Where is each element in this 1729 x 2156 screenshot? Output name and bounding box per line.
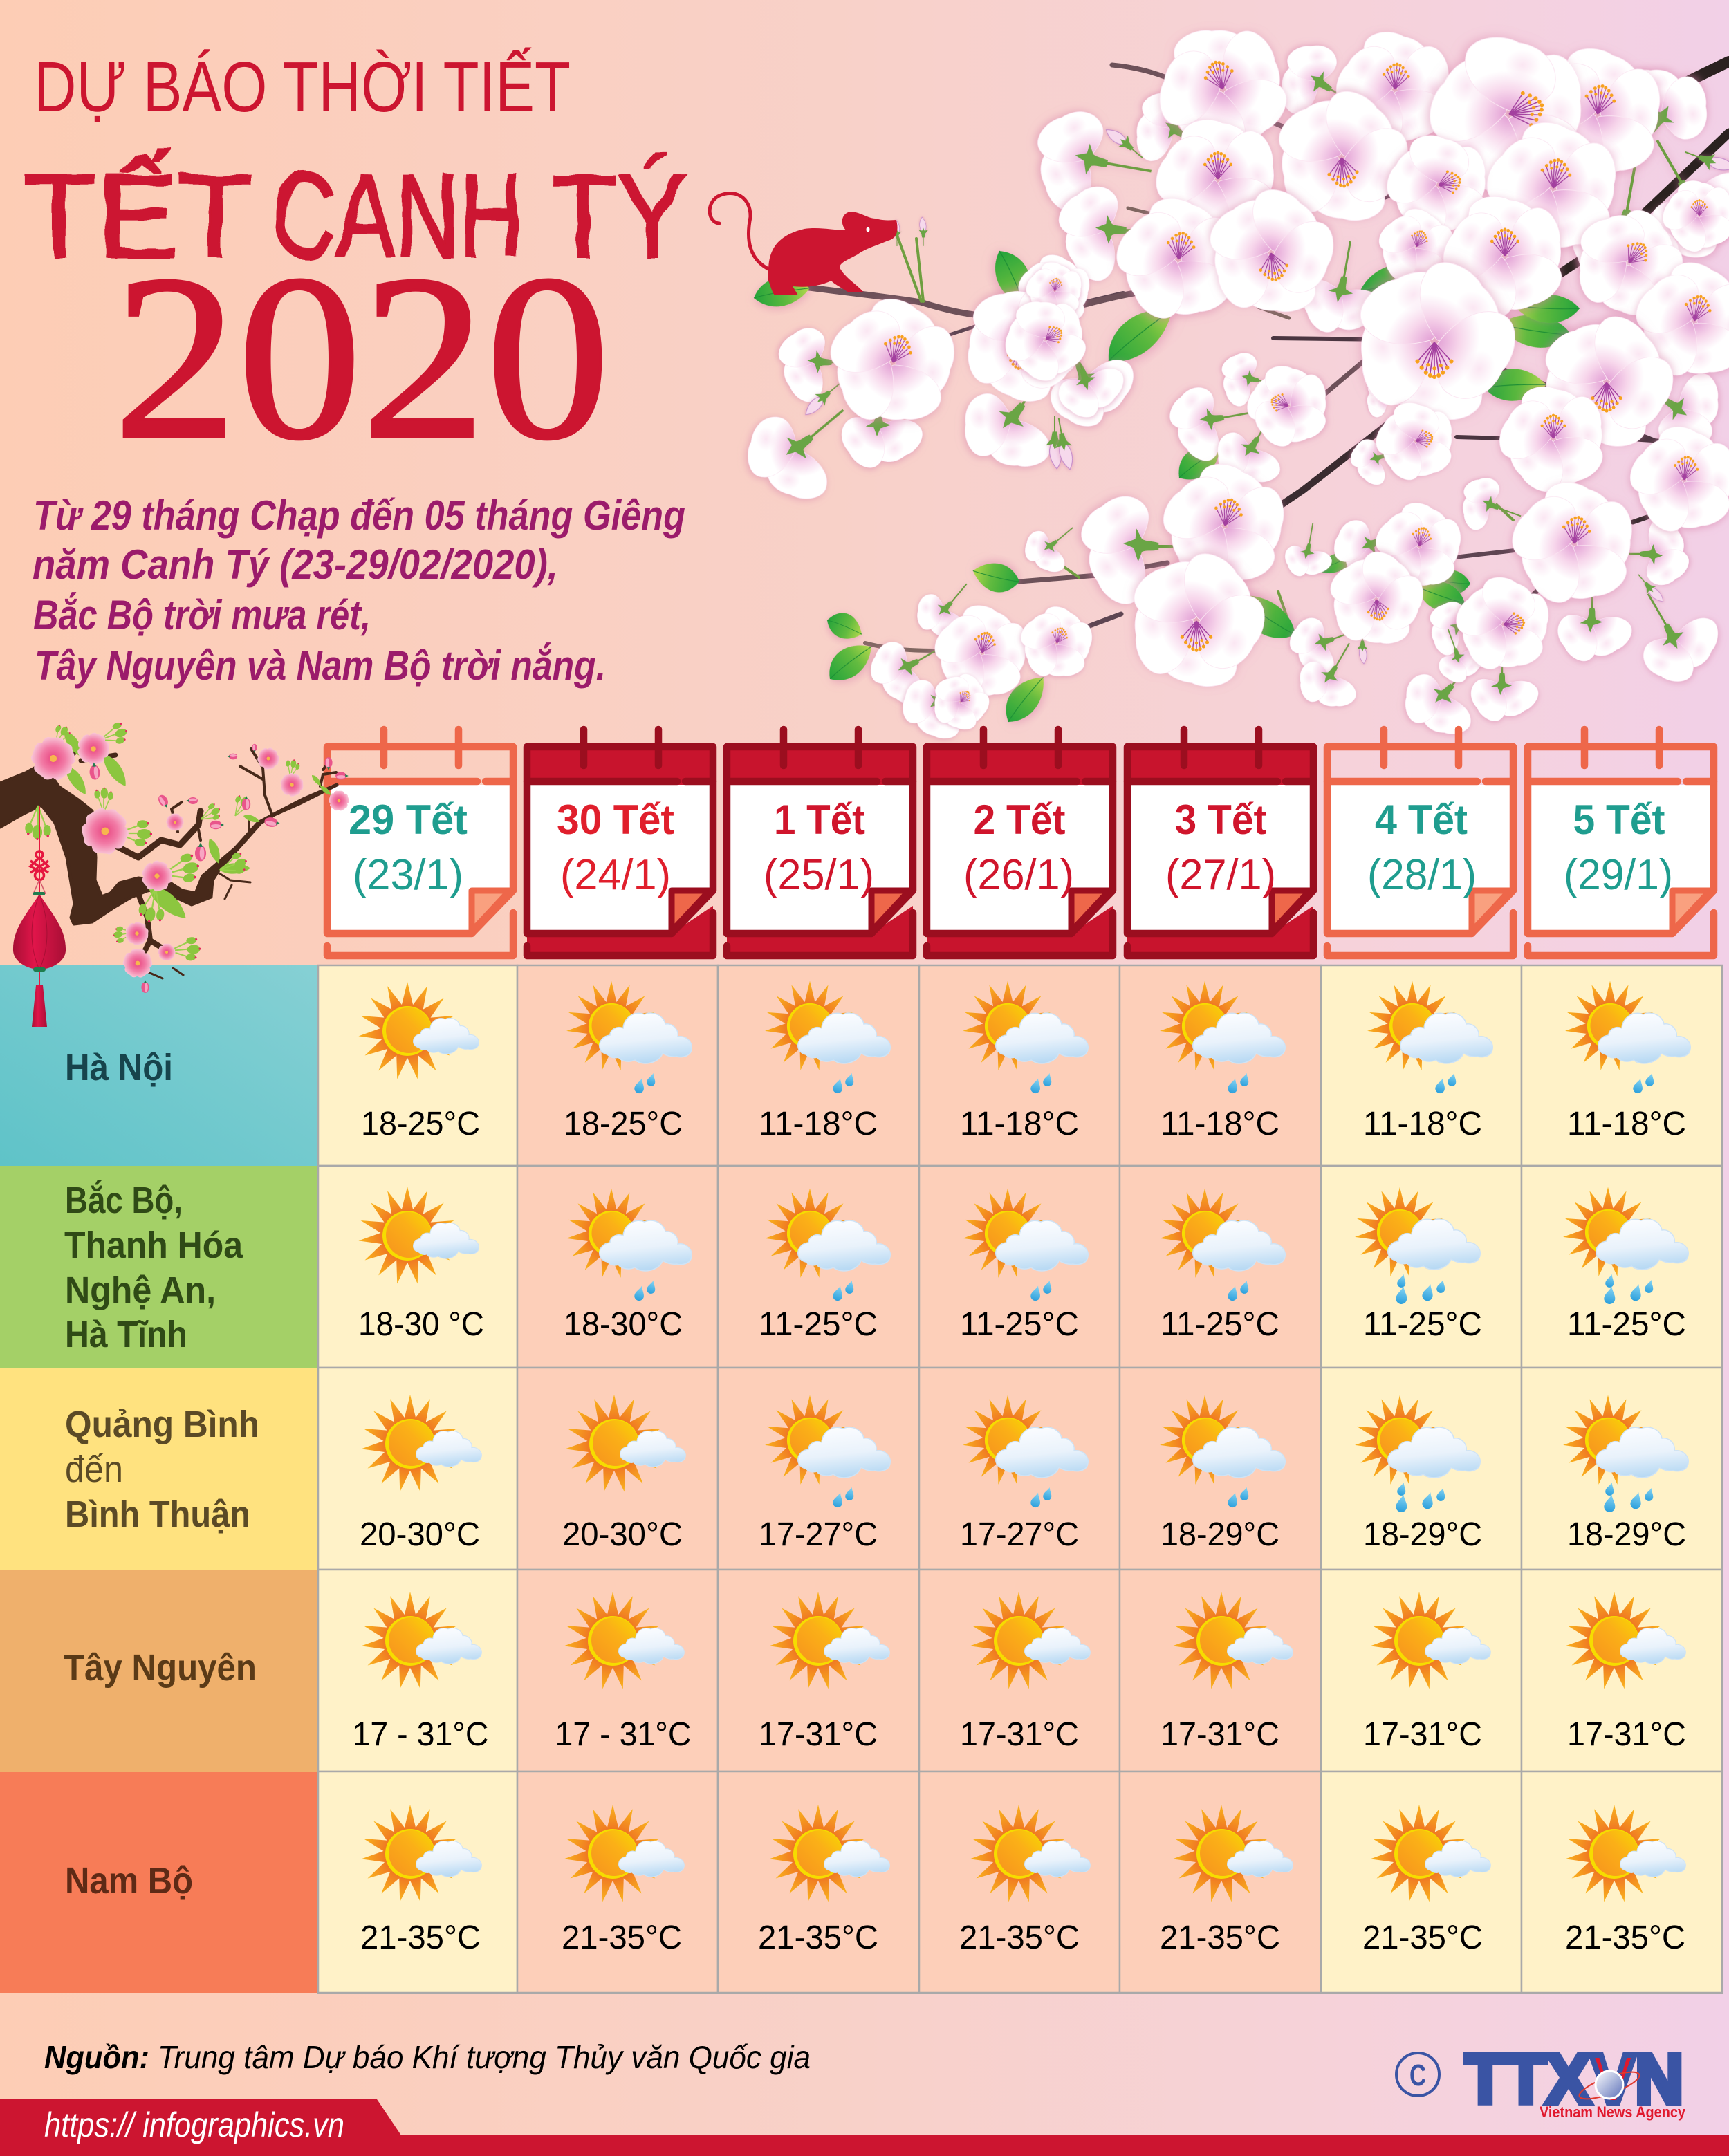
- title: Tết Canh Tý: CANH: [272, 149, 524, 282]
- row: Hà Nội: 18-25°C: [361, 1106, 480, 1142]
- region label: Bắc Bộ: Hà Tĩnh: [65, 1314, 187, 1355]
- calendar: 2 Tết: 2 Tết: [974, 797, 1066, 843]
- region label: Tây Nguyên: Tây Nguyên: [64, 1647, 257, 1689]
- calendar: 4 Tết: [1327, 729, 1513, 956]
- row: Tây Nguyên: 17-31°C: [1567, 1716, 1686, 1753]
- side flowers and buds: [718, 22, 1729, 760]
- row: Bắc Bộ, Thanh Hóa, Nghệ An, Hà Tĩnh: 11-25°C: [1363, 1306, 1482, 1343]
- row: Nam Bộ: 21-35°C: [562, 1920, 682, 1956]
- row: Quảng Bình đến Bình Thuận: [0, 1368, 1722, 1570]
- calendar: 4 Tết: (28/1): [1367, 851, 1477, 899]
- summary text: Tây Nguyên và Nam Bộ trời nắng.: [35, 642, 606, 689]
- full blossoms: [804, 10, 1729, 746]
- rat mascot: [710, 194, 898, 310]
- calendar: 3 Tết: (27/1): [1165, 851, 1276, 899]
- branches: [809, 62, 1729, 651]
- row: Bắc Bộ, Thanh Hóa, Nghệ An, Hà Tĩnh: [0, 1166, 1722, 1368]
- region label: Bắc Bộ: Nghệ An,: [65, 1270, 216, 1311]
- row: Bắc Bộ, Thanh Hóa, Nghệ An, Hà Tĩnh: 11-25°C: [759, 1306, 878, 1343]
- calendar: 3 Tết: 3 Tết: [1174, 797, 1267, 843]
- footer band with website: https:// infographics.vn: [44, 2106, 344, 2144]
- panel: weather table: [0, 965, 1722, 1993]
- calendar: 5 Tết: [1528, 729, 1714, 956]
- row: Tây Nguyên: 17-31°C: [759, 1716, 878, 1753]
- row: Quảng Bình đến Bình Thuận: 17-27°C: [759, 1516, 878, 1553]
- calendar: 30 Tết: 30 Tết: [557, 797, 674, 843]
- row: Bắc Bộ, Thanh Hóa, Nghệ An, Hà Tĩnh: 11-25°C: [1161, 1306, 1279, 1343]
- region label: Tây Nguyên: [0, 1570, 317, 1772]
- summary text: năm Canh Tý (23-29/02/2020),: [33, 541, 558, 588]
- calendar: 29 Tết: (23/1): [353, 851, 463, 899]
- logo: TTXVN: Vietnam News Agency: [1540, 2103, 1686, 2121]
- region label: Bắc Bộ: Thanh Hóa: [64, 1225, 243, 1266]
- row: Tây Nguyên: [0, 1570, 1722, 1772]
- row: Hà Nội: 11-18°C: [759, 1106, 878, 1142]
- row: Tây Nguyên: 17-31°C: [1161, 1716, 1279, 1753]
- calendar: 5 Tết: 5 Tết: [1573, 797, 1665, 843]
- calendar: 2 Tết: [927, 729, 1113, 956]
- row: Quảng Bình đến Bình Thuận: 17-27°C: [960, 1516, 1079, 1553]
- region label: Hà Nội: [0, 965, 317, 1166]
- calendar: 4 Tết: 4 Tết: [1375, 797, 1468, 843]
- calendar: 3 Tết: [1127, 729, 1313, 956]
- row: Quảng Bình đến Bình Thuận: 18-29°C: [1161, 1516, 1279, 1553]
- branch: [0, 749, 337, 978]
- region label: Nam Bộ: [0, 1772, 317, 1993]
- row: Tây Nguyên: 17 - 31°C: [555, 1716, 692, 1753]
- row: Nam Bộ: [0, 1772, 1722, 1993]
- source note: Nguồn:: [44, 2039, 149, 2075]
- row: Nam Bộ: 21-35°C: [360, 1920, 481, 1956]
- row: Bắc Bộ, Thanh Hóa, Nghệ An, Hà Tĩnh: 11-25°C: [960, 1306, 1079, 1343]
- row: Bắc Bộ, Thanh Hóa, Nghệ An, Hà Tĩnh: 18-30 °C: [358, 1306, 484, 1343]
- calendar headers: [327, 729, 1714, 956]
- pink blossoms: [25, 721, 350, 993]
- row: Nam Bộ: 21-35°C: [1362, 1920, 1483, 1956]
- calendar: 2 Tết: (26/1): [963, 851, 1074, 899]
- title: Tết Canh Tý: TẾT: [23, 149, 252, 282]
- row: Hà Nội: 11-18°C: [1161, 1106, 1279, 1142]
- row: Bắc Bộ, Thanh Hóa, Nghệ An, Hà Tĩnh: 18-30°C: [564, 1306, 683, 1343]
- blossom branch illustration: [718, 10, 1729, 760]
- row: Hà Nội: 11-18°C: [1363, 1106, 1482, 1142]
- source note: Trung tâm Dự báo Khí tượng Thủy văn Quốc gia: [158, 2039, 811, 2075]
- row: Quảng Bình đến Bình Thuận: 18-29°C: [1363, 1516, 1482, 1553]
- region label: Quảng Bình đến Bình Thuận: Quảng Bình: [65, 1404, 259, 1445]
- row: Nam Bộ: 21-35°C: [1565, 1920, 1685, 1956]
- region label: Nam Bộ: Nam Bộ: [65, 1860, 193, 1902]
- calendar: 30 Tết: [527, 729, 713, 956]
- footer band with website: [0, 2099, 1729, 2156]
- peach branch with lantern: [0, 721, 350, 1027]
- calendar: 29 Tết: [327, 729, 513, 956]
- region label: Bắc Bộ: Bắc Bộ,: [65, 1180, 183, 1221]
- row: Tây Nguyên: 17-31°C: [1363, 1716, 1482, 1753]
- heading: forecast: DỰ BÁO THỜI TIẾT: [34, 47, 571, 127]
- row: Hà Nội: [0, 965, 1722, 1166]
- calendar: 1 Tết: [727, 729, 913, 956]
- calendar: 30 Tết: (24/1): [560, 851, 671, 899]
- summary text: [33, 492, 685, 689]
- calendar: 1 Tết: 1 Tết: [774, 797, 865, 843]
- logo: TTXVN: C: [1409, 2059, 1426, 2092]
- row: Hà Nội: 11-18°C: [1567, 1106, 1686, 1142]
- title: Tết Canh Tý: [23, 149, 688, 282]
- row: Tây Nguyên: 17 - 31°C: [353, 1716, 488, 1753]
- region label: Hà Nội: Hà Nội: [65, 1047, 173, 1088]
- row: Tây Nguyên: 17-31°C: [960, 1716, 1079, 1753]
- row: Hà Nội: 18-25°C: [564, 1106, 683, 1142]
- row: Nam Bộ: 21-35°C: [959, 1920, 1080, 1956]
- calendar: 5 Tết: (29/1): [1564, 851, 1673, 899]
- row: Quảng Bình đến Bình Thuận: 18-29°C: [1567, 1516, 1686, 1553]
- logo: TTXVN: TTXVN: [1465, 2041, 1683, 2118]
- summary text: Từ 29 tháng Chạp đến 05 tháng Giêng: [33, 492, 685, 539]
- row: Nam Bộ: 21-35°C: [758, 1920, 878, 1956]
- row: Quảng Bình đến Bình Thuận: 20-30°C: [562, 1516, 683, 1553]
- calendar: 29 Tết: 29 Tết: [349, 797, 468, 843]
- icon: lantern: [13, 806, 66, 1027]
- leaves: [820, 243, 1580, 729]
- row: Hà Nội: 11-18°C: [960, 1106, 1079, 1142]
- calendar: 1 Tết: (25/1): [764, 851, 874, 899]
- summary text: Bắc Bộ trời mưa rét,: [33, 592, 371, 638]
- row: Quảng Bình đến Bình Thuận: 20-30°C: [360, 1516, 480, 1553]
- row: Nam Bộ: 21-35°C: [1160, 1920, 1280, 1956]
- region label: Quảng Bình đến Bình Thuận: [0, 1368, 317, 1570]
- region label: Quảng Bình đến Bình Thuận: đến: [65, 1449, 123, 1490]
- region label: Bắc Bộ: [0, 1166, 317, 1368]
- region label: Quảng Bình đến Bình Thuận: Bình Thuận: [65, 1494, 250, 1535]
- row: Bắc Bộ, Thanh Hóa, Nghệ An, Hà Tĩnh: 11-25°C: [1567, 1306, 1686, 1343]
- title: Tết Canh Tý: TÝ: [550, 149, 688, 282]
- title: year 2020: 2020: [113, 226, 610, 488]
